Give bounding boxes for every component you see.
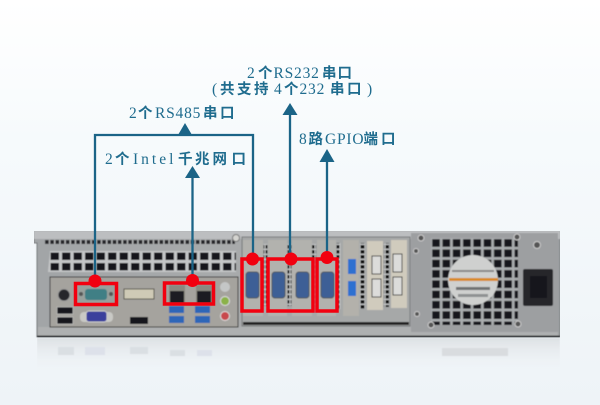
audio jacks (220, 296, 230, 306)
red highlight boxes (76, 259, 337, 311)
connector lines (95, 112, 327, 280)
RS485 line (95, 135, 253, 280)
rear grill (48, 251, 236, 272)
label: 2 Intel gigabit LAN: 兆 (195, 148, 210, 169)
label: 2 RS485 ports: RS485 (155, 105, 201, 122)
label: supports 4 232 ports: ) (367, 81, 373, 98)
label: supports 4 232 ports: 个 (284, 78, 299, 99)
red markers (88, 251, 334, 288)
top vents (45, 240, 235, 244)
rs485 db9 port (78, 285, 115, 303)
Intel LAN line (191, 176, 194, 280)
RS232 line (289, 112, 291, 259)
label: 2 Intel gigabit LAN: 口 (232, 148, 246, 169)
label: 2 RS232 ports: RS232 (274, 65, 320, 82)
arrow: RS232 (282, 103, 298, 115)
label: supports 4 232 ports: ( (212, 81, 218, 98)
arrow: RS485 (178, 123, 192, 135)
HDMI port (130, 317, 148, 324)
label: 8 GPIO ports: 路 (308, 128, 324, 149)
expansion slots (242, 237, 410, 326)
label: 2 Intel gigabit LAN: 网 (212, 148, 227, 169)
label: 8 GPIO ports: 端 (364, 128, 378, 149)
label: 8 GPIO ports: 口 (381, 128, 396, 149)
arrow: Intel (185, 166, 200, 178)
chassis body (34, 231, 560, 337)
label: 8 GPIO ports: GPIO (325, 131, 364, 148)
power socket (523, 269, 553, 306)
label: supports 4 232 ports: 口 (347, 78, 362, 99)
PS/2 port (58, 289, 70, 301)
label: supports 4 232 ports: 支 (237, 78, 252, 99)
slot perforations (264, 244, 268, 306)
label: 2 Intel gigabit LAN: 千 (178, 148, 192, 169)
fan grille (431, 238, 518, 325)
fan sticker (448, 255, 498, 305)
arrow: GPIO (320, 149, 334, 162)
screw (232, 234, 240, 242)
label: 2 Intel gigabit LAN: Intel (133, 151, 176, 168)
LAN ports (169, 285, 212, 303)
PSU screws (414, 234, 540, 328)
label: 2 RS485 ports: 串 (203, 102, 218, 123)
label: supports 4 232 ports: 持 (254, 78, 269, 99)
server chassis rear (34, 231, 560, 338)
serial ports (246, 272, 259, 298)
label: 2 RS485 ports: 个 (138, 102, 153, 123)
label: 2 RS232 ports: 口 (338, 62, 352, 83)
DVI port (124, 289, 154, 299)
label: 2 RS232 ports: 2 (247, 65, 256, 82)
chassis reflection (37, 338, 560, 374)
USB cards (343, 240, 359, 316)
label: 2 RS232 ports: 个 (258, 62, 273, 83)
USB3 ports (169, 306, 184, 313)
arrowheads (178, 103, 334, 178)
label: 2 RS485 ports: 口 (220, 102, 234, 123)
label: supports 4 232 ports: 232 (300, 81, 325, 98)
label: 2 Intel gigabit LAN: 个 (115, 148, 130, 169)
GPIO line (326, 160, 328, 257)
power supply (411, 233, 558, 332)
label: supports 4 232 ports: 4 (274, 81, 283, 98)
USB ports (57, 307, 73, 314)
label: 2 RS232 ports: 串 (322, 62, 336, 83)
I/O panel (50, 277, 238, 327)
label: 8 GPIO ports: 8 (299, 131, 308, 148)
label: supports 4 232 ports: 共 (220, 78, 234, 99)
label: 2 RS485 ports: 2 (129, 105, 138, 122)
label: supports 4 232 ports: 串 (330, 78, 344, 99)
VGA port (80, 311, 113, 322)
label: 2 Intel gigabit LAN: 2 (105, 151, 114, 168)
